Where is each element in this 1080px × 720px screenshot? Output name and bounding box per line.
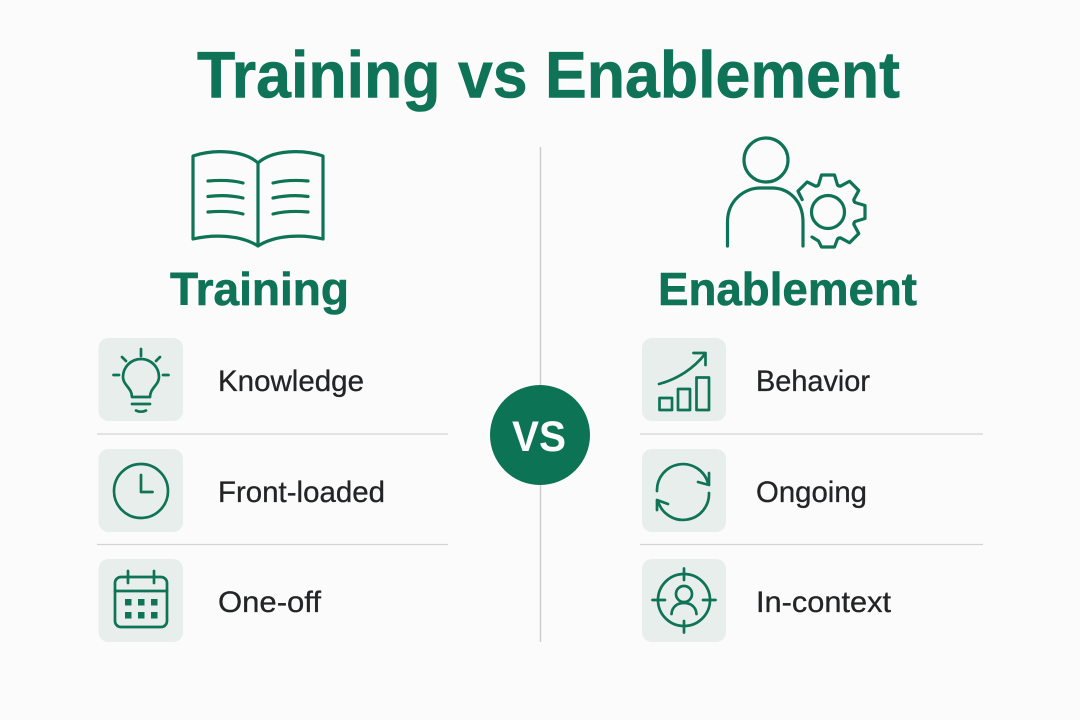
vs badge: VS [512, 413, 566, 461]
icon tile: light bulb [98, 338, 183, 421]
label: behavior: Behavior [756, 365, 870, 398]
row: front-loaded [98, 449, 385, 532]
row: behavior [642, 338, 870, 421]
heading: enablement: Enablement [658, 263, 917, 315]
label: front-loaded: Front-loaded [218, 476, 385, 509]
row: in-context [642, 559, 891, 642]
row: one-off [98, 559, 322, 642]
label: in-context: In-context [756, 586, 891, 619]
row: ongoing [642, 449, 867, 532]
icon: open book [193, 152, 323, 246]
vs badge [490, 385, 590, 485]
label: one-off: One-off [218, 586, 322, 619]
icon tile: calendar [98, 559, 183, 642]
icon: person with gear [728, 138, 865, 247]
icon tile: clock [98, 449, 183, 532]
panel: training [97, 152, 448, 642]
icon tile: refresh cycle [642, 449, 726, 532]
icon tile: rising bar chart [642, 338, 726, 421]
icon tile: target on person [642, 559, 726, 642]
title: Training vs Enablement [197, 38, 900, 112]
panel: enablement [640, 138, 983, 642]
label: knowledge: Knowledge [218, 365, 364, 398]
row: knowledge [98, 338, 364, 421]
heading: training: Training [170, 263, 349, 315]
label: ongoing: Ongoing [756, 476, 867, 509]
